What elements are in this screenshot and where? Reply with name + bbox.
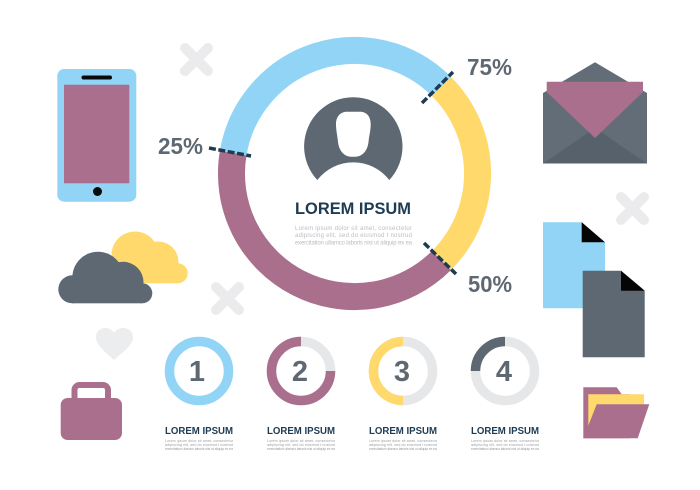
divider: 50%: [424, 243, 456, 274]
step 3: [369, 342, 438, 451]
icon: briefcase: [61, 385, 122, 440]
icon: user avatar: [304, 97, 402, 180]
step 1: Lorem ipsum dolor sit amet, consectetur: [165, 439, 234, 443]
icon: clouds: [58, 232, 188, 303]
label: 25%: 25%: [158, 133, 203, 159]
label: 75%: 75%: [467, 54, 512, 80]
step 3: Lorem ipsum dolor sit amet, consectetur: [369, 439, 438, 443]
step 4: Lorem ipsum dolor sit amet, consectetur: [471, 439, 540, 443]
divider: 75%: [422, 72, 453, 103]
step 2: 2: [292, 356, 308, 388]
segment: yellow: [442, 86, 478, 260]
icon: heart: [96, 328, 133, 360]
step 1: 1: [189, 356, 205, 388]
text block: main: Lorem ipsum dolor sit amet, consectetur: [295, 226, 412, 232]
text block: main: exercitation ullamco laboris nisi ut aliquip ex ea: [295, 240, 413, 246]
step 2: exercitation ullamco laboris nisi ut aliquip ex ea: [267, 447, 335, 451]
step 1: adipiscing elit, sed do eiusmod t nostrud: [165, 443, 233, 447]
step 4: adipiscing elit, sed do eiusmod t nostrud: [471, 443, 539, 447]
step 1: exercitation ullamco laboris nisi ut aliquip ex ea: [165, 447, 233, 451]
step 4: LOREM IPSUM: [471, 425, 539, 437]
label: 50%: 50%: [468, 271, 512, 297]
icon: envelope: [543, 62, 647, 163]
text block: main: [295, 226, 413, 246]
step 2: Lorem ipsum dolor sit amet, consectetur: [267, 439, 336, 443]
step 2: adipiscing elit, sed do eiusmod t nostrud: [267, 443, 335, 447]
segment: blue: [233, 50, 442, 153]
icon: folder: [583, 387, 649, 438]
step 2: [267, 342, 336, 451]
step 4: 4: [496, 356, 512, 388]
divider: 25%: [209, 148, 251, 156]
yellow cloud: [110, 232, 188, 283]
text block: main: adipiscing elit, sed do eiusmod t nostrud: [295, 233, 412, 239]
grey cloud: [58, 252, 152, 303]
step 4: [471, 342, 540, 451]
step 3: exercitation ullamco laboris nisi ut aliquip ex ea: [369, 447, 437, 451]
segment: plum: [231, 153, 442, 297]
heading: main: LOREM IPSUM: [295, 200, 411, 218]
step 1: [165, 342, 234, 451]
icon: smartphone: [57, 69, 136, 202]
step 3: 3: [394, 356, 410, 388]
icon: cross top: [185, 48, 208, 71]
donut chart: [231, 50, 478, 297]
step 3: adipiscing elit, sed do eiusmod t nostrud: [369, 443, 437, 447]
icon: cross right: [621, 197, 644, 220]
icon: documents: [543, 222, 645, 357]
icon: cross bottom: [216, 287, 239, 310]
step 2: LOREM IPSUM: [267, 425, 335, 437]
step 1: LOREM IPSUM: [165, 425, 233, 437]
step 3: LOREM IPSUM: [369, 425, 437, 437]
step 4: exercitation ullamco laboris nisi ut aliquip ex ea: [471, 447, 539, 451]
